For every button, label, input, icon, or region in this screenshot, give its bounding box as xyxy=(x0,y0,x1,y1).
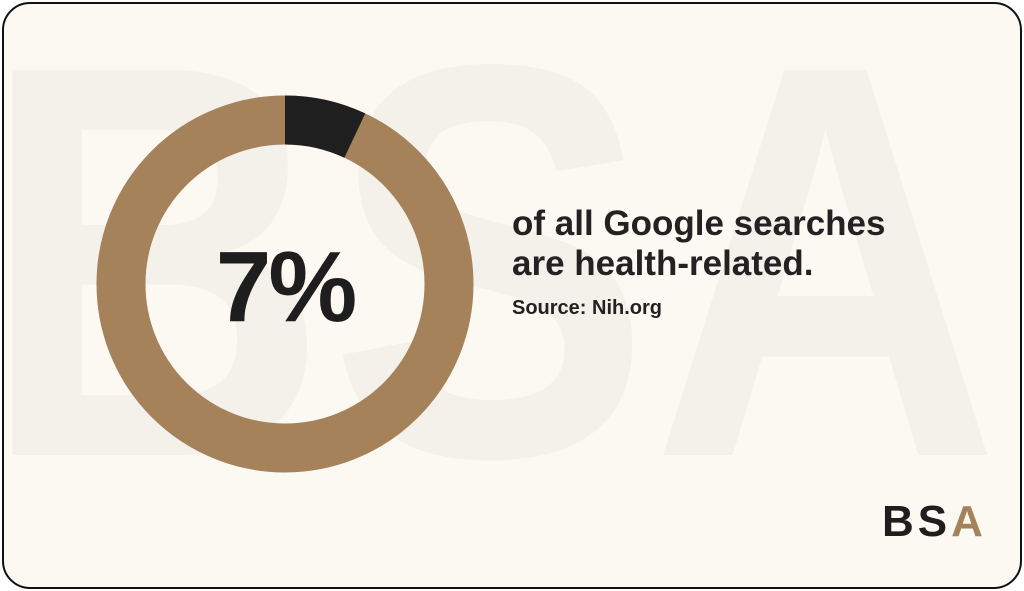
headline text: of all Google searches xyxy=(512,204,885,243)
logo: BSA: BSA xyxy=(882,497,987,546)
big percentage: 7% xyxy=(216,231,354,343)
headline text: are health-related. xyxy=(512,244,814,283)
headline text xyxy=(512,204,885,283)
source: Source: Nih.org xyxy=(512,297,662,319)
